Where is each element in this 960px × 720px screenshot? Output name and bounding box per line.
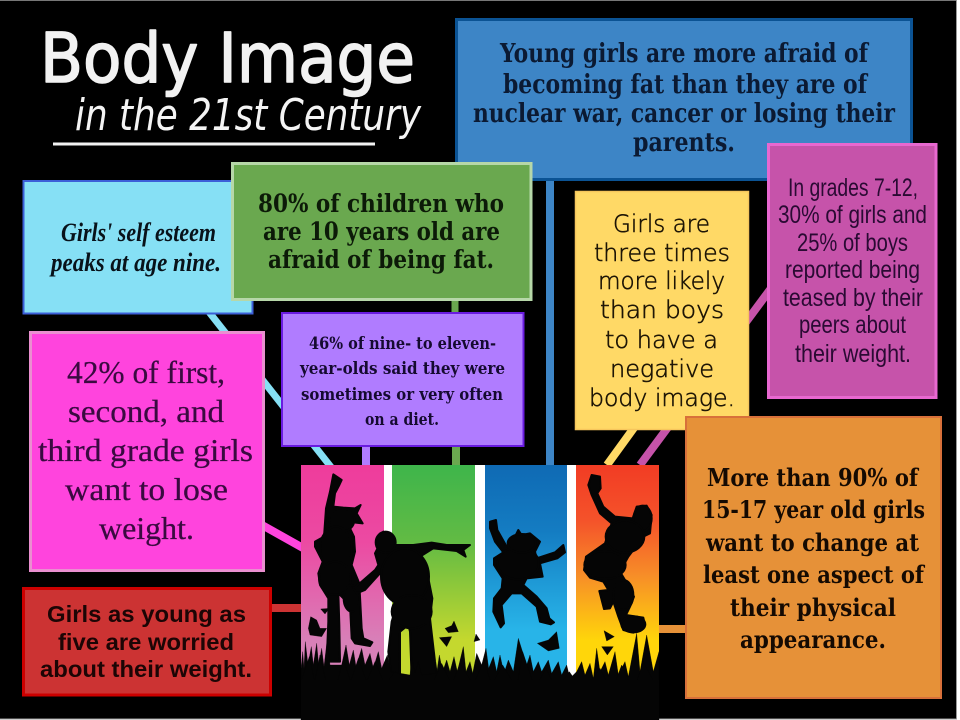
- panel: magenta teasing: their weight.: [795, 340, 911, 368]
- panel: pink 42 percent: [30, 332, 264, 570]
- silhouette: boy in orange stripe: [584, 475, 652, 633]
- panel: magenta teasing: In grades 7-12,: [788, 174, 918, 202]
- panel: orange 90 percent: least one aspect of: [703, 560, 925, 589]
- illustration: jumping silhouettes on coloured stripes: [301, 465, 659, 720]
- connector lines: [209, 170, 772, 629]
- panel: purple dieting: 46% of nine- to eleven-: [309, 334, 496, 354]
- panel: orange 90 percent: appearance.: [740, 625, 886, 654]
- grass: [301, 633, 659, 720]
- panel: yellow negative body image: [576, 192, 748, 430]
- butterflies: [308, 608, 614, 655]
- panel: pink 42 percent: want to lose: [65, 471, 228, 507]
- panel: blue fear statistic: becoming fat than they are of: [503, 70, 869, 100]
- panel: yellow negative body image: more likely: [598, 267, 725, 295]
- panel: yellow negative body image: Girls are: [613, 210, 710, 238]
- panel: yellow negative body image: body image.: [589, 384, 735, 412]
- panel: yellow negative body image: to have a: [605, 326, 718, 354]
- panel: blue fear statistic: Young girls are more afraid of: [499, 39, 870, 69]
- panel: purple dieting: sometimes or very often: [301, 385, 503, 405]
- panel: red young age: five are worried: [58, 629, 234, 655]
- title: [40, 19, 422, 146]
- panel: red young age: Girls as young as: [47, 601, 246, 627]
- panel: cyan self esteem: Girls' self esteem: [61, 218, 216, 247]
- panel: yellow negative body image: negative: [610, 355, 714, 383]
- panel: orange 90 percent: want to change at: [705, 528, 919, 557]
- panel: green 80 percent: are 10 years old are: [263, 217, 500, 246]
- panel: green 80 percent: [232, 164, 531, 300]
- subheading: in the 21st Century: in the 21st Century: [75, 90, 422, 141]
- panel: magenta teasing: reported being: [785, 256, 920, 284]
- panel: pink 42 percent: 42% of first,: [67, 354, 225, 390]
- panel: cyan self esteem: peaks at age nine.: [49, 248, 221, 277]
- panel: pink 42 percent: third grade girls: [38, 432, 253, 468]
- panel: magenta teasing: peers about: [799, 311, 906, 339]
- panel: magenta teasing: [768, 144, 936, 398]
- panel: yellow negative body image: three times: [594, 239, 730, 267]
- panel: green 80 percent: 80% of children who: [258, 189, 504, 218]
- panel: orange 90 percent: More than 90% of: [707, 463, 919, 492]
- panel: blue fear statistic: [456, 20, 912, 180]
- heading: Body Image: Body Image: [40, 19, 415, 99]
- panel: blue fear statistic: parents.: [633, 128, 735, 158]
- title underline: [53, 142, 375, 146]
- panel: purple dieting: year-olds said they were: [299, 359, 505, 379]
- panel: orange 90 percent: their physical: [730, 593, 896, 622]
- panel: orange 90 percent: [686, 417, 941, 698]
- panel: magenta teasing: 25% of boys: [797, 229, 908, 257]
- silhouette: man in green stripe: [353, 532, 470, 678]
- silhouette: girl in blue stripe: [490, 520, 565, 627]
- panel: pink 42 percent: second, and: [68, 393, 224, 429]
- panel: purple dieting: [282, 313, 524, 446]
- panel: red young age: about their weight.: [40, 656, 252, 682]
- panel: magenta teasing: teased by their: [783, 284, 923, 312]
- panel: cyan self esteem: [24, 181, 252, 314]
- panel: magenta teasing: 30% of girls and: [778, 201, 927, 229]
- panel: pink 42 percent: weight.: [99, 510, 194, 546]
- silhouette: girl on left: [315, 474, 372, 662]
- panel: purple dieting: on a diet.: [365, 410, 439, 430]
- panel: yellow negative body image: than boys: [600, 296, 724, 324]
- panel: red young age: [24, 588, 270, 695]
- panel: green 80 percent: afraid of being fat.: [268, 245, 494, 274]
- panel: orange 90 percent: 15-17 year old girls: [702, 495, 925, 524]
